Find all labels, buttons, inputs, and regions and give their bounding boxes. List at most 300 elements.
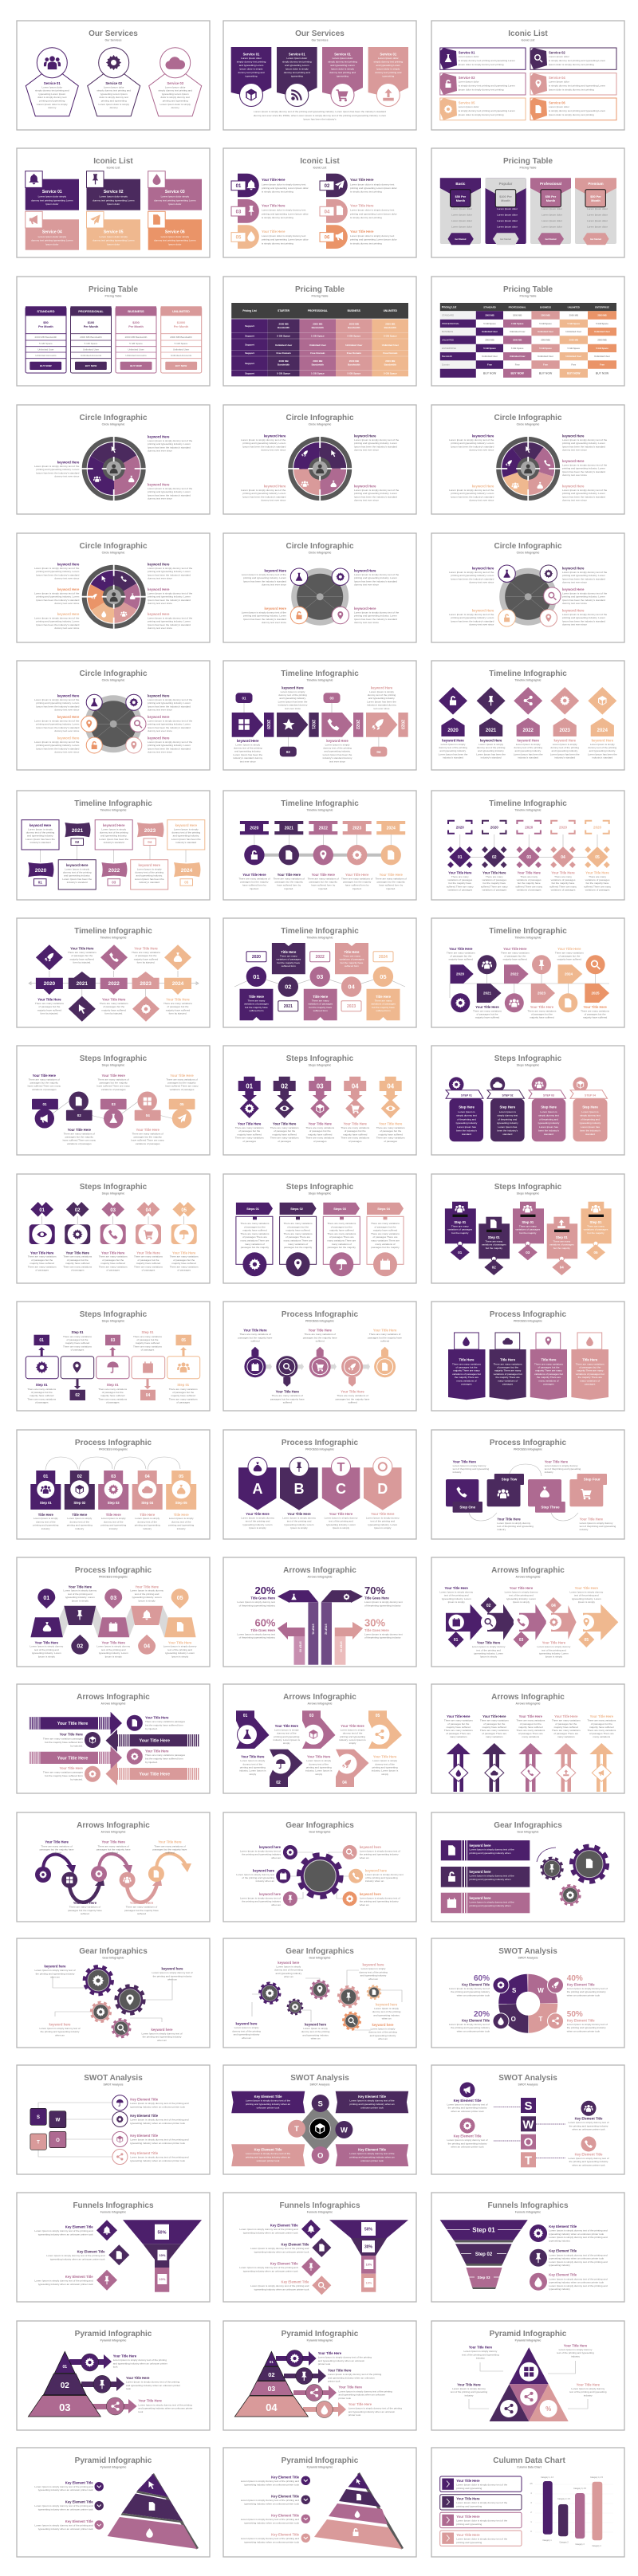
step 02: Lorem Ipsum is simply <box>67 1517 93 1520</box>
text items: text of theprinting and typesetting <box>580 1525 616 1528</box>
column 01: Steps 01 <box>246 1208 259 1211</box>
matrix cells <box>440 311 616 378</box>
block 01: Service 01 <box>42 190 62 194</box>
text top 2: form by injected. <box>73 961 91 964</box>
keyword top left: dummy text ever since <box>261 448 286 451</box>
heading: Pyramid Infographic <box>307 2338 333 2342</box>
text bottom left: Lorem Ipsum is simply <box>235 743 261 746</box>
text bottom: text of the printing and <box>101 1648 126 1651</box>
chevron 01 <box>236 1710 270 1749</box>
text 2: and typesetting industry when an unknown <box>328 2376 375 2379</box>
item 01: Your Title Here <box>262 178 286 182</box>
text items: Lorem Ipsum is simply dummy <box>453 1464 486 1467</box>
stat 60%: Lorem Ipsum is simply dummy text <box>237 1632 275 1636</box>
step 04: 04 <box>145 1475 151 1479</box>
funnel step 02: Step 02 <box>475 2252 493 2257</box>
item 1: Key Element Title <box>271 2476 300 2480</box>
heading: SWOT Analysis <box>104 2083 124 2087</box>
text bottom 3: Step 01 <box>107 1383 119 1387</box>
top texts: There are many variations <box>555 951 584 954</box>
step 2023: Lorem Ipsum is simply <box>553 743 577 746</box>
column 01: many variations There are <box>240 1239 270 1242</box>
banner 04: simply dummy text printing <box>373 61 403 64</box>
pentagon service 01: printing and typesetting <box>39 99 65 102</box>
heading: Steps Infographic <box>80 1183 148 1192</box>
card D: Lorem Ipsum is simply dummy <box>366 1516 400 1519</box>
bottom texts: majority have suffered <box>530 1016 554 1019</box>
heading: Pyramid Infographic <box>100 2466 126 2469</box>
text 4: but the majority have suffered form <box>45 1774 83 1777</box>
text 03: There are many variations of <box>98 1078 129 1081</box>
item 3: Key Element Title <box>130 2134 159 2138</box>
keyword top left: Lorem Ipsum is simply dummy text of the <box>34 567 80 570</box>
panel: Timeline zigzag circles <box>223 918 416 1027</box>
panel: SWOT diamond with panels <box>223 2065 416 2174</box>
step 01: 01 <box>458 855 463 860</box>
step 2021: Lorem Ipsum has been the <box>476 752 506 756</box>
heading: Our Services <box>105 38 122 41</box>
block 02 <box>86 171 140 210</box>
service 02 <box>530 48 616 69</box>
step 2020: Lorem Ipsum is simply <box>441 743 466 746</box>
keyword top left: keyword Here <box>265 569 287 572</box>
item 01 <box>231 174 309 197</box>
top pentagons: 2024 <box>565 972 573 976</box>
item 4: Key Element Title <box>130 2151 159 2155</box>
pentagon 2020: 01 <box>242 697 246 700</box>
trapezoid 05: 05 <box>177 1596 183 1601</box>
keyword bottom left: Lorem Ipsum is simply dummy text of the <box>449 489 494 492</box>
column 04: There are many variations <box>371 1232 400 1235</box>
block 06: Lorem Ipsum dolor simply <box>161 235 189 238</box>
keyword bottom right: printing and typesetting industry. Lorem <box>354 492 397 495</box>
card basic: Lorem Ipsum dolor <box>451 214 472 217</box>
panel O: Lorem Ipsum is simply dummy text of the <box>349 2152 395 2155</box>
hub <box>291 568 349 626</box>
text right: keyword here <box>360 1845 381 1849</box>
matrix cells: 2000 MB <box>541 314 550 317</box>
keyword top right: dummy text ever since <box>562 580 587 583</box>
top texts: text of the printing and <box>574 1594 599 1597</box>
block 01: dummy text printing typesetting Lorem <box>31 198 73 202</box>
list box 3: Your Title Here <box>456 2515 480 2519</box>
tag 02: many variations of <box>498 1379 518 1382</box>
keyword top right: keyword Here <box>148 693 170 698</box>
text items: Lorem Ipsum is simply dummy <box>571 2387 605 2390</box>
text items: industry <box>497 1528 506 1531</box>
table body: 5 GB Space <box>347 335 360 338</box>
arrow 1: many variations <box>450 1735 467 1738</box>
keyword top right: Lorem Ipsum is simply dummy text of the <box>354 573 400 576</box>
text top: Ipsum is simply <box>139 1599 156 1602</box>
top texts: Your Title Here <box>575 1586 599 1590</box>
banner 03: typesetting <box>337 75 349 78</box>
text bottom 3: of passages but the <box>102 1391 124 1394</box>
card popular <box>485 178 526 245</box>
box 04: Lorem Ipsum has been the <box>135 878 164 881</box>
item 04: 04 <box>325 210 330 214</box>
card popular: Lorem Ipsum dolor <box>497 225 518 228</box>
text bottom: Ipsum is simply <box>38 1655 55 1658</box>
letter circles: O <box>317 2152 323 2160</box>
stat 50: 50% <box>567 2010 583 2019</box>
heading: Timeline Infographic <box>514 936 542 939</box>
item 1: typesetting industry when an unknown printer took <box>38 2488 93 2492</box>
top texts: Your Title Here <box>510 1586 534 1590</box>
text items: text of theprinting and typesetting <box>545 1467 581 1471</box>
top texts: typesetting industry. Lorem <box>506 1597 536 1600</box>
line <box>460 834 597 857</box>
keyword bottom right: dummy text ever since <box>562 623 587 626</box>
bottom texts: Your Title Here <box>542 1641 566 1645</box>
text items: Lorem Ipsum is simply dummy <box>497 1522 531 1525</box>
text top 4: form by injected. <box>137 961 155 964</box>
arrow 2: of passages but the <box>483 1722 506 1726</box>
matrix cells: Free <box>571 363 577 367</box>
plan professional: PROFESSIONAL <box>78 309 104 313</box>
arc 4 <box>120 1872 162 1903</box>
pentagon service 02: Lorem Ipsum dolor is simply <box>98 103 129 106</box>
block 04: Service 04 <box>42 230 62 234</box>
tag 01: of passages but the <box>455 1366 478 1369</box>
panel O <box>336 2144 408 2166</box>
keyword top left: Lorem Ipsum is simply dummy text of the <box>242 573 286 576</box>
panel bottom 5: but the majority have <box>372 1006 395 1009</box>
text top 2: Your Title Here <box>70 947 94 951</box>
step 04: There are many variations <box>341 1126 370 1129</box>
table body: 2000 MB <box>385 359 396 363</box>
diamond top 5 <box>164 944 191 970</box>
heading: Steps Infographic <box>102 1320 124 1323</box>
heading: Arrows Infographic <box>515 1702 541 1706</box>
text items: text of the printing and typesetting <box>462 2353 499 2356</box>
arrow step 02 <box>321 1590 363 1665</box>
box 02: industry's standard <box>67 881 88 884</box>
block 03: Service 03 <box>165 190 185 194</box>
matrix cells: 2000 MB <box>569 314 578 317</box>
heading: Circle Infographic <box>102 552 125 555</box>
letter circles: T <box>539 2016 543 2023</box>
triangle <box>490 2347 569 2421</box>
step 04: of passages but the <box>137 1259 160 1262</box>
text top: keyword Here <box>282 685 304 690</box>
heading: Iconic List <box>107 166 120 169</box>
step 01: There are many variations <box>28 1255 57 1259</box>
keyword top right: keyword Here <box>562 434 585 438</box>
panel: Pyramid three levels <box>17 2321 210 2430</box>
banner 02: Ipsum dolor is simply <box>286 67 309 70</box>
trapezoid 03: 03 <box>110 1596 116 1601</box>
panel: Funnel four items <box>223 2193 416 2302</box>
pyramid <box>28 2351 100 2417</box>
pentagon 2022 <box>321 693 363 737</box>
plan standard: STANDARD <box>37 309 55 313</box>
list box 4: Lorem Ipsum dolor is simply dummy text of the <box>456 2538 507 2541</box>
pentagon service 02: dolor is simply dummy text <box>99 96 128 99</box>
panel: Timeline brackets and diamonds <box>431 791 624 900</box>
top texts: of passages but the <box>558 955 581 958</box>
text top 2: There are many variations <box>63 1335 92 1338</box>
keyword top 2: dummy text of the printing <box>359 1970 388 1973</box>
text items: Lorem Ipsum is simply dummy <box>464 2350 498 2353</box>
step 02: variations of passages <box>482 889 507 892</box>
table body: 5 GB Space <box>347 371 360 375</box>
text 3: Your Title Here <box>145 1749 169 1753</box>
step 03 <box>100 1099 127 1129</box>
list box 1: Lorem Ipsum dolor is simply dummy text of the <box>456 2484 507 2487</box>
top texts: text of the printing and <box>444 1594 469 1597</box>
text 1: Lorem Ipsum is simply dummy text of the printing <box>318 2356 372 2359</box>
text top right: and typesetting industry. <box>368 697 395 700</box>
step 04: 2020 <box>559 826 568 829</box>
banner 01 <box>231 47 271 107</box>
panel T <box>231 2144 305 2166</box>
keyword bottom left: Lorem Ipsum is simply dummy text of the <box>449 613 494 616</box>
box 04: industry's standard <box>139 881 160 884</box>
item 3: typesetting industry when an unknown printer took <box>549 2281 605 2284</box>
column 01: of passages There are <box>242 1235 267 1239</box>
panel: Gear with six keywords <box>223 1812 416 1922</box>
bottom texts: passages but the majority have <box>68 1909 102 1912</box>
table body: 1 GB Space <box>311 335 325 338</box>
trapezoid 04: 04 <box>144 1643 150 1650</box>
arrow 3: Your Title Here <box>519 1714 543 1718</box>
step 01: dummy text of the <box>36 1520 56 1523</box>
text items: industry <box>584 2393 593 2397</box>
text top: simply <box>349 1742 356 1745</box>
keyword bottom left: dummy text ever since <box>54 751 80 754</box>
matrix cells: BUSINESS <box>442 330 453 333</box>
footer text: Ipsum has been the industry's <box>303 118 337 121</box>
arcs <box>469 1464 578 1521</box>
connectors <box>38 2103 112 2157</box>
heading: Circle Infographic <box>494 414 562 422</box>
step 05: 2020 <box>593 826 602 829</box>
axis labels: Category 1 <box>542 2539 552 2542</box>
text bottom 5: Your Title Here <box>166 998 190 1002</box>
banner 02: and typesetting Lorem <box>285 64 309 67</box>
bar 1: Lorem Ipsum is simply dummy text of the <box>469 1848 514 1852</box>
panel S <box>231 2091 305 2113</box>
card A: Your Title Here <box>246 1512 270 1516</box>
heading: Pyramid Infographic <box>307 2466 333 2469</box>
card D: D <box>377 1481 388 1497</box>
text items <box>451 2343 607 2397</box>
service 03: is simply dummy text printing and typesetting Lorem <box>459 84 515 88</box>
panel: Circle Infographic six icons <box>17 661 210 770</box>
service 04: is simply dummy text printing and typesetting Lorem <box>549 84 606 88</box>
step 03: printing and typesetting <box>100 1524 126 1527</box>
keyword bottom right: Lorem Ipsum is simply dummy text of the <box>562 613 608 616</box>
stat 20: 20% <box>474 2010 490 2019</box>
panel: Steps staggered columns <box>431 1174 624 1283</box>
bottom texts: Ipsum is simply <box>545 1655 562 1659</box>
bottom texts: Ipsum is simply <box>480 1655 498 1659</box>
step 01 <box>32 1099 58 1129</box>
text top right: text ever since <box>374 707 390 710</box>
box 01: industry's standard <box>30 841 51 844</box>
tag 04: There are many variations <box>576 1362 605 1365</box>
matrix cells: 5 GB Space <box>539 347 552 350</box>
item 4 <box>241 2533 310 2544</box>
matrix header: UNLIMITED <box>568 306 580 309</box>
tag 04: variations of passages but <box>576 1372 605 1376</box>
text top: printing and typesetting <box>340 1735 365 1738</box>
text bottom: simply <box>315 1773 323 1776</box>
icon circles <box>451 955 605 1012</box>
text bottom: printing and typesetting <box>240 1766 266 1769</box>
text bottom 5: majority have suffered <box>171 1394 195 1397</box>
heading: Steps Infographic <box>494 1183 562 1192</box>
tag 03: Title Here <box>541 1358 557 1361</box>
number diamonds: 01 <box>454 1638 459 1643</box>
step 2023: keyword Here <box>553 738 577 743</box>
card C: Your Title Here <box>329 1512 353 1516</box>
chart gridlines <box>535 2484 613 2532</box>
block 05: dummy text printing typesetting Lorem <box>93 239 135 242</box>
keyword bottom left: Lorem Ipsum is simply dummy text of the <box>34 740 80 744</box>
heading: Steps Infographic <box>494 1054 562 1063</box>
text bottom middle: Lorem Ipsum is simply <box>325 743 350 746</box>
stat 70%: 70% <box>364 1584 385 1596</box>
step 2021: industry's standard <box>481 756 502 760</box>
step four <box>569 1474 607 1506</box>
axis labels: 4 <box>530 2493 532 2495</box>
top texts: majority have suffered <box>449 958 473 961</box>
keyword bottom left: keyword Here <box>265 607 287 611</box>
text left: the printing and typesetting industry <box>242 1900 281 1903</box>
keyword bottom mid: keyword here <box>305 2022 327 2026</box>
keyword top left: dummy text ever since <box>54 577 80 580</box>
text bottom: simply <box>381 1773 388 1776</box>
card step 02: Lorem Ipsum is <box>499 1110 516 1113</box>
keyword top left: keyword Here <box>264 434 286 438</box>
pyramid labels: 02 <box>268 2371 275 2378</box>
text 1: Your Title Here <box>113 2354 137 2358</box>
panel top 4 <box>335 943 368 974</box>
pentagon service 02: Lorem Ipsum dolor <box>104 85 124 88</box>
text 4: and typesetting industry when an unknown <box>349 2410 395 2413</box>
step 03: 03 <box>111 1475 116 1479</box>
keyword middle right: dummy text ever since <box>562 602 587 605</box>
heading: Pyramid Infographic <box>515 2338 541 2342</box>
arrow 2 <box>480 1714 509 1792</box>
keyword top right: Lorem Ipsum is simply dummy text of the <box>148 698 193 701</box>
table header: PROFESSIONAL <box>308 309 328 312</box>
top texts: Your Title Here <box>101 1840 126 1844</box>
plan business <box>116 306 156 373</box>
banner 02: Lorem Ipsum dolor <box>286 57 307 60</box>
matrix cells: Free <box>515 363 520 367</box>
service 01: Service 01 <box>459 51 475 54</box>
panel bottom 3: There are many <box>312 999 329 1003</box>
step 2020: industry's standard <box>443 756 463 760</box>
panel W: Lorem Ipsum is simply dummy text of the <box>349 2099 395 2103</box>
service 02: Service 02 <box>549 51 565 54</box>
step 05: printing and typesetting <box>168 1524 194 1527</box>
text bottom: Your Title Here <box>101 1640 126 1644</box>
top texts: There are many variations of <box>41 1844 73 1848</box>
heading: Pricing Table <box>89 285 138 294</box>
step 04: suffered There are many <box>549 885 577 888</box>
panel: Gear with bars <box>431 1812 624 1922</box>
keyword bottom left: Ipsum has been the industry's standard <box>36 747 80 750</box>
card step 01: been the industry's <box>456 1129 477 1132</box>
arrow step 01: STEP 01 <box>311 1624 314 1635</box>
keyword 2: when an <box>167 1978 177 1981</box>
matrix cells: 5 GB Space <box>568 322 581 325</box>
arrow 1: majority have suffered <box>447 1726 471 1729</box>
letter column: O <box>524 2136 534 2150</box>
column 01: There are many variations <box>240 1232 270 1235</box>
tag 01: many variations of <box>456 1379 477 1382</box>
column 03: of passages but the <box>331 1225 352 1228</box>
step 02: of passages <box>71 1269 85 1272</box>
card basic: Lorem Ipsum dolor <box>451 219 472 222</box>
item 1 <box>239 2220 321 2239</box>
item 2: Key Element Title <box>549 2249 577 2253</box>
keyword bottom right: Ipsum has been the industry's standard <box>148 623 191 626</box>
text top 2: of passages but the <box>66 1338 89 1341</box>
heading: PROCESS Infographic <box>99 1575 128 1578</box>
item 3: Lorem Ipsum is simply dummy text of the printing and <box>239 2266 298 2269</box>
heading: Pricing Table <box>311 295 329 298</box>
step 2022: injected. <box>319 887 328 890</box>
right item W: Lorem Ipsum is simply dummy text of <box>568 2121 609 2124</box>
column 04: Step 01 <box>556 1235 568 1239</box>
panel W: printing and typesetting industry when an <box>349 2103 395 2106</box>
card B: B <box>293 1481 305 1497</box>
key 03 <box>309 1347 331 1377</box>
heading: SWOT Analysis <box>84 2074 143 2083</box>
keyword top right: Ipsum has been the industry's standard <box>148 573 191 576</box>
letter column: S <box>524 2099 533 2113</box>
heading: Timeline Infographic <box>514 808 542 811</box>
panel: Timeline pentagons and circles <box>431 918 624 1027</box>
table body: 2000 MB <box>279 359 289 363</box>
arrow 2: majority have suffered <box>482 1726 506 1729</box>
matrix cells: 2000 MB <box>513 314 522 317</box>
bottom texts: There are many variations <box>527 1009 557 1012</box>
left item O: Key Element Title <box>454 2134 482 2138</box>
step 2024: dummy text of the printing <box>588 746 616 749</box>
keyword top left: keyword Here <box>472 434 494 438</box>
keyword middle right: printing and typesetting industry. Lorem <box>562 595 605 599</box>
keyword mid: keyword here <box>376 2002 398 2006</box>
circle chart <box>81 436 147 501</box>
arrow 5: Your Title Here <box>590 1714 614 1718</box>
stat 60% <box>237 1616 276 1639</box>
column 01: There are many <box>451 1224 469 1227</box>
keyword top right: printing and typesetting industry. Lorem <box>562 442 605 445</box>
bottom texts <box>473 1005 610 1019</box>
step 2024: injected. <box>386 887 396 890</box>
heading: Timeline Infographic <box>489 670 567 678</box>
key 01 <box>244 1347 266 1377</box>
heading: Arrows Infographic <box>307 1575 333 1578</box>
keyword top left: Ipsum has been the industry's standard <box>242 445 286 448</box>
text top: dummy text of the <box>277 1732 297 1735</box>
arrow 2: of passages There are <box>482 1732 507 1735</box>
text bottom 3: There are many variations <box>98 1388 128 1391</box>
table body: 2000 MB <box>385 322 396 325</box>
year labels: 2022 <box>316 955 325 960</box>
bottom texts: Your Title Here <box>583 1005 607 1009</box>
step 2022: dummy text of the printing <box>514 746 542 749</box>
service 06: is simply dummy text printing and typesetting Lorem <box>549 109 606 112</box>
flag 2021: 02 <box>75 840 80 844</box>
matrix cells: 5 GB Space <box>511 347 524 350</box>
